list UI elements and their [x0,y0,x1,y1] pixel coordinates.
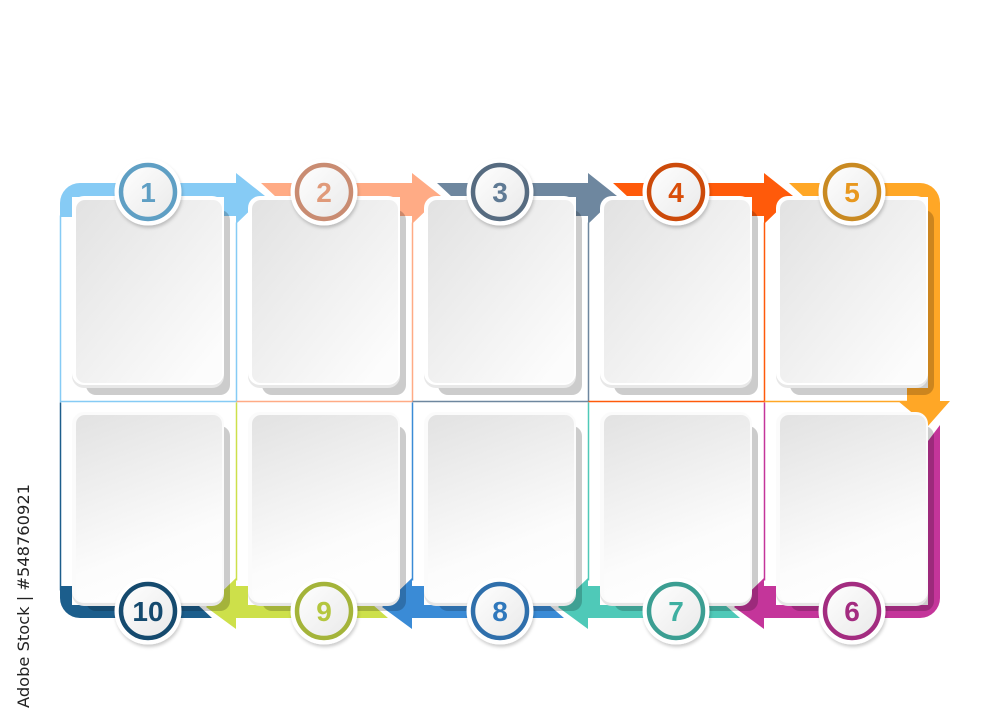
number badge 10: 10 [132,596,164,627]
card 1 [72,196,224,388]
card 8 [424,412,576,606]
number badge 6 [818,578,886,644]
card 9 [248,412,400,606]
card 2 [248,196,400,388]
number badge 6: 6 [844,596,860,627]
number badge 9 [290,578,358,644]
number badge 4: 4 [668,177,684,208]
arrow band 7 [558,578,740,629]
card 4 [600,196,752,388]
number badge 8: 8 [492,596,508,627]
arrow band 6 [734,425,940,629]
number badge 9: 9 [316,596,332,627]
arrow band 1 [60,173,265,224]
number badge 8 [466,578,534,644]
number badge 2: 2 [316,177,332,208]
arrow band 2 [261,173,441,224]
arrow band 3 [437,173,617,224]
arrow band 10 [60,586,212,618]
number badge 1: 1 [140,177,156,208]
card shadows [86,210,934,611]
number badge 5 [818,158,886,226]
card 10 [72,412,224,606]
number badge 7 [642,578,710,644]
stock credit text: Adobe Stock | #548760921 [14,484,33,708]
arrow band 8 [382,578,564,629]
cell borders [60,216,930,590]
arrow band 9 [206,578,388,629]
number badge 3 [466,158,534,226]
number badge 7: 7 [668,596,684,627]
card 7 [600,412,752,606]
number badge 1 [114,158,182,226]
number badge 4 [642,158,710,226]
card 3 [424,196,576,388]
number badge 3: 3 [492,177,508,208]
card 6 [776,412,928,606]
arrow band 4 [613,173,793,224]
number badge 2 [290,158,358,226]
number badge 5: 5 [844,177,860,208]
arrow band 5 [789,183,950,426]
number badge 10 [114,578,182,644]
card 5 [776,196,928,388]
